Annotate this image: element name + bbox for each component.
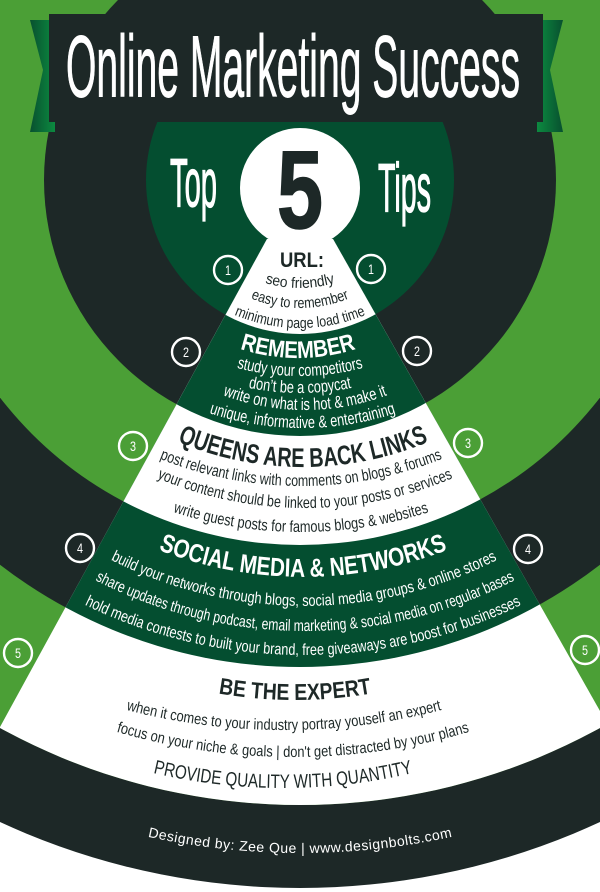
tip 2: Remember: REMEMBER: [241, 334, 356, 358]
text: Top: [170, 144, 217, 222]
tip 4: Social media and networks: [85, 534, 520, 658]
tip 2: Remember: unique, informative & entertaining: [210, 404, 396, 428]
badge numbers: [15, 261, 588, 661]
tip 3: Queens are back links: QUEENS ARE BACK LINKS: [180, 426, 426, 468]
tip 1: URL: [235, 249, 364, 331]
tip 1: URL: easy to remember: [252, 291, 348, 308]
badge numbers: 3: [130, 438, 136, 454]
tip 4: Social media and networks: SOCIAL MEDIA & NETWORKS: [160, 534, 446, 577]
tip 4: Social media and networks: share updates through podcast, email marketing & social media on regular bases: [96, 572, 514, 633]
badge numbers: 2: [414, 343, 420, 359]
tip 5: Be the expert: PROVIDE QUALITY WITH QUANTITY: [154, 760, 410, 790]
tip 3: Queens are back links: post relevant links with comments on blogs & forums: [159, 451, 442, 486]
text: Tips: [378, 150, 431, 226]
tip 5: Be the expert: BE THE EXPERT: [220, 678, 370, 700]
tip 3: Queens are back links: write guest posts for famous blogs & websites: [174, 504, 428, 532]
badge numbers: 3: [465, 435, 471, 451]
tip 2: Remember: study your competitors: [238, 359, 362, 378]
keyhole circle: [240, 128, 360, 248]
credit line: Designed by: Zee Que | www.designbolts.com: [148, 828, 452, 856]
badge numbers: 5: [15, 645, 21, 661]
tip 3: Queens are back links: your content should be linked to your posts or services: [156, 470, 452, 510]
tip 1: URL: URL:: [280, 249, 324, 272]
tip 1: URL: seo friendly: [266, 274, 333, 288]
tip 5: Be the expert: focus on your niche & goals | don't get distracted by your plans: [118, 722, 469, 760]
tip 4: Social media and networks: hold media contests to built your brand, free giveaways are boost for businesses: [85, 594, 520, 658]
badge numbers: 1: [368, 261, 374, 277]
badge numbers: 1: [225, 262, 231, 278]
ribbon left: [30, 20, 55, 132]
badge numbers: 4: [525, 541, 531, 557]
tip 5: Be the expert: when it comes to your industry portray youself an expert: [128, 700, 442, 734]
badge numbers: 5: [582, 642, 588, 658]
tip 5: Be the expert: [118, 678, 469, 790]
badge numbers: 2: [183, 344, 189, 360]
tip 3: Queens are back links: [156, 426, 452, 532]
tip 2: Remember: [210, 334, 396, 428]
numeral 5: 5: [277, 129, 323, 252]
tip 2: Remember: don’t be a copycat: [250, 376, 352, 396]
title banner: [49, 14, 543, 122]
central wedge of five bands: [0, 239, 600, 805]
ribbon right: [537, 20, 563, 132]
badge numbers: 4: [77, 540, 83, 556]
tip 1: URL: minimum page load time: [235, 308, 364, 331]
tip 2: Remember: write on what is hot & make it: [224, 385, 388, 410]
tip 4: Social media and networks: build your networks through blogs, social media groups & online stores: [112, 550, 496, 609]
number badges: [4, 255, 599, 667]
